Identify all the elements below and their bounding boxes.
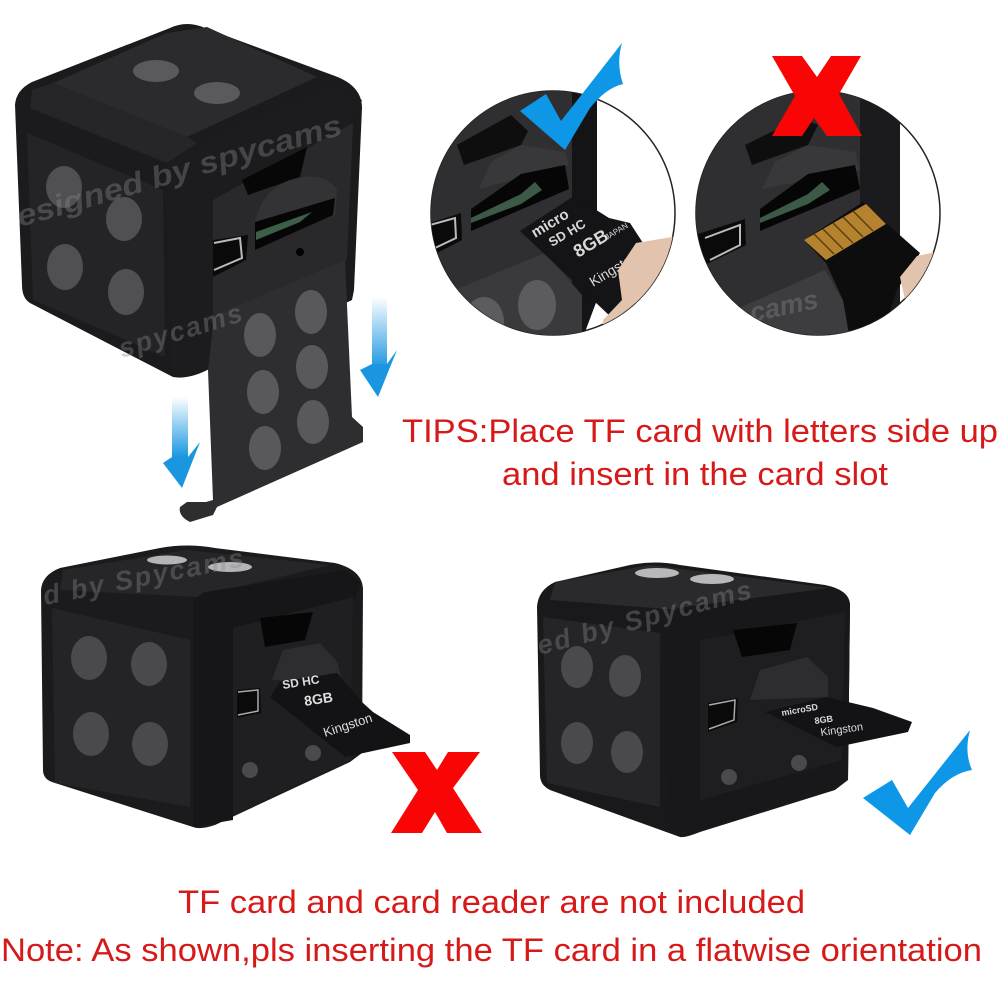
icon: red X — [772, 56, 862, 136]
camera: incorrect tilt: d by Spycams — [40, 542, 248, 611]
inset: incorrect card insertion — [695, 90, 945, 340]
arrow: right down — [360, 297, 397, 397]
note text: TF card and card reader are not included — [178, 884, 805, 920]
icon: red X — [391, 752, 482, 833]
SD card lying flat: microSD — [781, 702, 819, 718]
SD card lying flat: 8GB — [814, 713, 834, 726]
tips text: and insert in the card slot — [502, 456, 888, 492]
icon: blue check mark — [863, 730, 972, 835]
tips text — [402, 413, 998, 492]
inset: correct card insertion — [430, 90, 678, 347]
micro SD card: 8GB — [570, 225, 612, 261]
micro SD card: SD HC — [546, 216, 589, 250]
note text — [1, 884, 982, 968]
tips text: TIPS:Place TF card with letters side up — [402, 413, 998, 449]
arrow: left down — [163, 397, 200, 488]
micro SD card contacts side — [804, 202, 920, 340]
camera with open door: esigned by spycams — [13, 109, 346, 234]
note text: Note: As shown,pls inserting the TF card in a flatwise orientation — [1, 932, 982, 968]
camera: correct flat: ed by Spycams — [534, 574, 757, 661]
SD card sticking upward: Kingston — [321, 710, 374, 740]
SD card sticking upward: SD HC — [281, 672, 321, 692]
SD card sticking upward: 8GB — [303, 689, 334, 709]
SD card sticking upward — [270, 672, 410, 757]
micro SD card — [520, 196, 643, 318]
camera with open door — [13, 24, 363, 522]
SD card lying flat — [765, 697, 912, 747]
camera: correct flat — [534, 562, 912, 837]
inset: incorrect card insertion: cams — [747, 284, 821, 328]
camera: incorrect tilt — [40, 542, 410, 828]
micro SD card: micro — [528, 206, 572, 241]
micro SD card: JAPAN — [603, 221, 630, 242]
micro SD card: Kingston — [586, 248, 641, 290]
door flap — [180, 260, 363, 522]
camera with open door: spycams — [115, 297, 248, 364]
SD card lying flat: Kingston — [820, 721, 864, 739]
icon: blue check mark — [520, 43, 623, 150]
